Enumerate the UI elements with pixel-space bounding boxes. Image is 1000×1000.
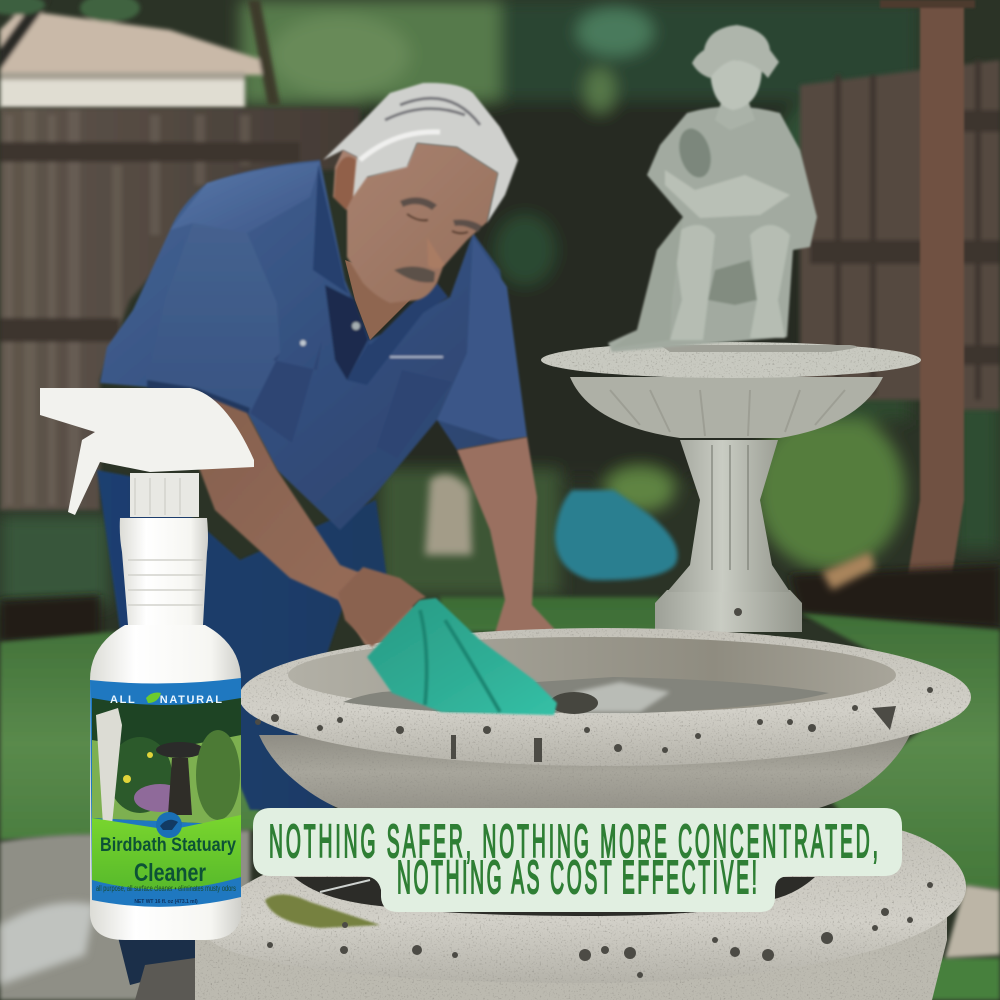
- left arm and hand: [457, 437, 613, 680]
- upper bowl: [570, 377, 883, 438]
- garden post: [880, 0, 975, 575]
- label photo of birdbath garden: [92, 698, 241, 825]
- left chest pocket: [250, 340, 322, 443]
- neck: [345, 260, 420, 340]
- label: Birdbath Statuary: [100, 835, 236, 856]
- teal ceramic pot: [555, 490, 678, 580]
- wooden fence left: [0, 108, 360, 510]
- polo shirt: [100, 160, 527, 530]
- stone pits: [255, 608, 933, 978]
- statue neck: [715, 100, 755, 130]
- man: [97, 83, 613, 1000]
- lower bowl underside: [259, 735, 910, 808]
- upper rim: [541, 342, 921, 378]
- bottle neck: [130, 473, 199, 517]
- statue body and robe: [608, 106, 817, 352]
- moss patch: [265, 894, 380, 928]
- label: [90, 678, 241, 907]
- tagline text: NOTHING SAFER, NOTHING MORE CONCENTRATED,: [269, 817, 878, 867]
- label: NET WT 16 fl. oz (473.1 ml): [134, 899, 198, 905]
- inner basin: [288, 637, 896, 713]
- lower rim: [239, 628, 971, 766]
- base ring: [204, 830, 966, 983]
- pedestal column: [667, 440, 790, 592]
- shirt collar and placket: [313, 165, 448, 385]
- water: [343, 677, 829, 713]
- label: all purpose, all surface cleaner • eliminates musty odors: [96, 884, 236, 893]
- tagline text: [269, 817, 878, 903]
- spray trigger head: [40, 388, 254, 515]
- tagline text: NOTHING AS COST EFFECTIVE!: [397, 853, 757, 903]
- silver hair: [323, 83, 518, 223]
- right arm: [197, 393, 430, 650]
- label texts: ALL NATURAL: [110, 694, 222, 706]
- pavement: [0, 830, 250, 1000]
- mulch bed: [0, 565, 1000, 642]
- statue: [608, 25, 817, 352]
- tan bag on the mulch: [822, 552, 875, 590]
- banner background: [253, 808, 902, 912]
- birdbath fountain: [195, 25, 971, 1000]
- base ring lower band: [195, 900, 947, 1000]
- tagline banner: [253, 808, 902, 912]
- lower trouser leg and shoe: [115, 925, 207, 1000]
- right chest pocket: [377, 370, 452, 458]
- head: [333, 143, 498, 303]
- statue legs: [670, 225, 715, 340]
- dark recess of the base ring: [294, 877, 815, 916]
- statue hair: [692, 25, 779, 78]
- pedestal base: [655, 590, 802, 632]
- lawn: [0, 597, 1000, 890]
- pale garden ornament: [425, 474, 472, 555]
- green cleaning cloth: [367, 598, 557, 715]
- statue head: [710, 60, 762, 110]
- jeans: [97, 470, 390, 810]
- hand on cloth: [338, 567, 426, 647]
- label: Cleaner: [134, 859, 206, 887]
- wooden fence right: [800, 60, 1000, 410]
- bottle body: [90, 625, 241, 940]
- house roof and eave: [0, 0, 280, 108]
- product: spray bottle: [40, 388, 254, 940]
